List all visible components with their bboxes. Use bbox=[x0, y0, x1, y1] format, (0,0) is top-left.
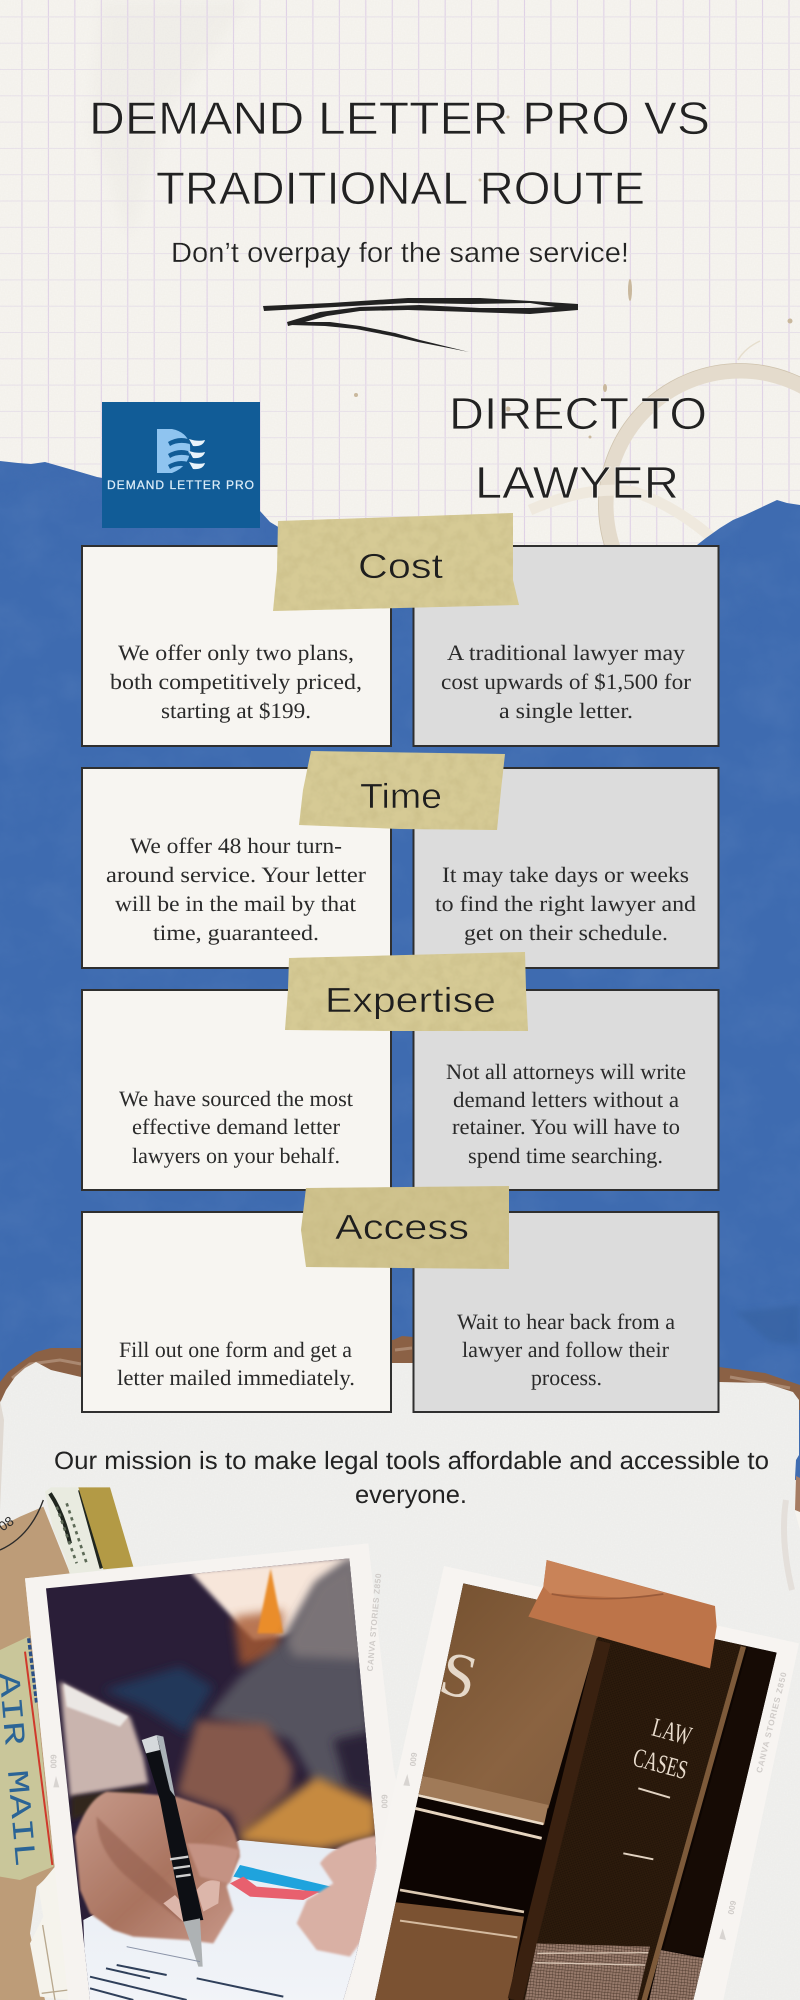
access: demand letter pro card bbox=[82, 1212, 391, 1412]
row: time bbox=[82, 751, 718, 968]
cost: tape label bbox=[273, 513, 519, 611]
expertise: demand letter pro card: lawyers on your behalf. bbox=[132, 1143, 340, 1168]
cost: direct to lawyer card bbox=[414, 546, 718, 746]
access: direct to lawyer card bbox=[414, 1212, 718, 1412]
access: direct to lawyer card: process. bbox=[531, 1365, 602, 1390]
frame print marks bbox=[403, 1671, 789, 1940]
photo: hand signing document bbox=[25, 1543, 400, 2000]
cost: direct to lawyer card: cost upwards of $1,500 for bbox=[441, 669, 692, 694]
torn tan paper bbox=[0, 1507, 70, 2000]
mission statement: Our mission is to make legal tools affordable and accessible to bbox=[54, 1447, 769, 1475]
expertise: direct to lawyer card: retainer. You will have to bbox=[452, 1114, 680, 1139]
heading: direct to lawyer bbox=[449, 388, 707, 508]
spine title: law cases: LAW bbox=[649, 1712, 695, 1751]
cost: demand letter pro card: both competitively priced, bbox=[110, 669, 362, 694]
air mail label bbox=[0, 1637, 53, 1880]
access: tape label bbox=[301, 1186, 509, 1269]
cost: demand letter pro card: starting at $199. bbox=[161, 698, 311, 723]
frame print marks: 009 bbox=[49, 1754, 59, 1768]
heading: direct to lawyer: LAWYER bbox=[475, 457, 679, 508]
time: direct to lawyer card: It may take days or weeks bbox=[442, 862, 689, 887]
time: direct to lawyer card: to find the right lawyer and bbox=[435, 891, 696, 916]
bottom torn white paper bbox=[0, 1330, 800, 2000]
expertise: tape label: Expertise bbox=[325, 981, 496, 1020]
frame print marks: CANVA STORIES Z850 bbox=[754, 1671, 789, 1774]
logo mark: letter D with waves bbox=[157, 429, 205, 473]
title: DEMAND LETTER PRO VS bbox=[89, 92, 710, 144]
torn blue paper background bbox=[0, 460, 800, 1480]
access: tape label: Access bbox=[335, 1208, 469, 1247]
logo: Demand Letter Pro bbox=[102, 402, 260, 528]
title: TRADITIONAL ROUTE bbox=[156, 162, 645, 214]
mission statement bbox=[54, 1447, 769, 1509]
spine title: law cases bbox=[623, 1712, 695, 1859]
pen bbox=[142, 1735, 203, 1967]
access: demand letter pro card: Fill out one form and get a bbox=[119, 1337, 352, 1362]
time: demand letter pro card: We offer 48 hour turn- bbox=[130, 833, 342, 858]
subtitle: Don’t overpay for the same service! bbox=[171, 237, 629, 268]
time: tape label bbox=[299, 751, 505, 830]
row: expertise bbox=[82, 952, 718, 1190]
expertise: direct to lawyer card: demand letters without a bbox=[453, 1087, 679, 1112]
expertise: demand letter pro card bbox=[82, 990, 391, 1190]
writing hand bbox=[75, 1792, 240, 1943]
background: grid paper bbox=[0, 0, 800, 620]
frame print marks bbox=[49, 1573, 390, 1808]
copper tape bbox=[528, 1560, 717, 1668]
time: direct to lawyer card bbox=[414, 768, 718, 968]
access: direct to lawyer card: Wait to hear back from a bbox=[457, 1309, 675, 1334]
cost: tape label: Cost bbox=[358, 547, 443, 586]
expertise: demand letter pro card: We have sourced the most bbox=[119, 1086, 353, 1111]
frame print marks: 009 bbox=[380, 1794, 390, 1808]
frame print marks: 009 bbox=[407, 1752, 419, 1767]
photo image: S bbox=[433, 1637, 484, 1714]
expertise: demand letter pro card: effective demand letter bbox=[132, 1114, 341, 1139]
document lines bbox=[90, 1965, 283, 2000]
expertise: direct to lawyer card: spend time searching. bbox=[468, 1143, 663, 1168]
expertise: direct to lawyer card bbox=[414, 990, 718, 1190]
cost: demand letter pro card: We offer only two plans, bbox=[118, 640, 354, 665]
row: access bbox=[82, 1186, 718, 1412]
photo image bbox=[375, 1584, 777, 2000]
postmark bbox=[0, 1500, 43, 1550]
access: demand letter pro card: letter mailed immediately. bbox=[117, 1365, 355, 1390]
logo: Demand Letter Pro: DEMAND LETTER PRO bbox=[107, 478, 254, 492]
frame print marks: CANVA STORIES Z850 bbox=[365, 1573, 383, 1672]
cost: direct to lawyer card: A traditional lawyer may bbox=[447, 640, 685, 665]
heading: direct to lawyer: DIRECT TO bbox=[449, 388, 707, 439]
green and gold stamp bbox=[45, 1487, 133, 1575]
row: cost bbox=[82, 513, 718, 746]
expertise: direct to lawyer card: Not all attorneys will write bbox=[446, 1059, 686, 1084]
photo image bbox=[46, 1558, 377, 2000]
coffee stains and droplets bbox=[354, 116, 800, 646]
time: demand letter pro card: time, guaranteed. bbox=[153, 920, 319, 945]
access: direct to lawyer card: lawyer and follow their bbox=[462, 1337, 670, 1362]
collage: torn stamps and air mail paper bbox=[0, 1487, 133, 2000]
spine title: law cases: CASES bbox=[630, 1742, 691, 1785]
expertise: tape label bbox=[285, 952, 528, 1031]
frame print marks: 009 bbox=[726, 1899, 738, 1915]
photo: law books bbox=[347, 1560, 799, 2000]
time: demand letter pro card: around service. Your letter bbox=[106, 862, 367, 887]
title bbox=[89, 92, 710, 214]
time: tape label: Time bbox=[360, 777, 442, 816]
time: direct to lawyer card: get on their schedule. bbox=[464, 920, 668, 945]
cost: direct to lawyer card: a single letter. bbox=[499, 698, 633, 723]
other hand fingers bbox=[297, 1835, 380, 1957]
time: demand letter pro card bbox=[82, 768, 391, 968]
cost: demand letter pro card bbox=[82, 546, 391, 746]
mission statement: everyone. bbox=[355, 1481, 467, 1509]
hand-drawn scribble underline bbox=[263, 298, 578, 352]
time: demand letter pro card: will be in the mail by that bbox=[115, 891, 356, 916]
torn white strip bbox=[30, 1867, 70, 2000]
